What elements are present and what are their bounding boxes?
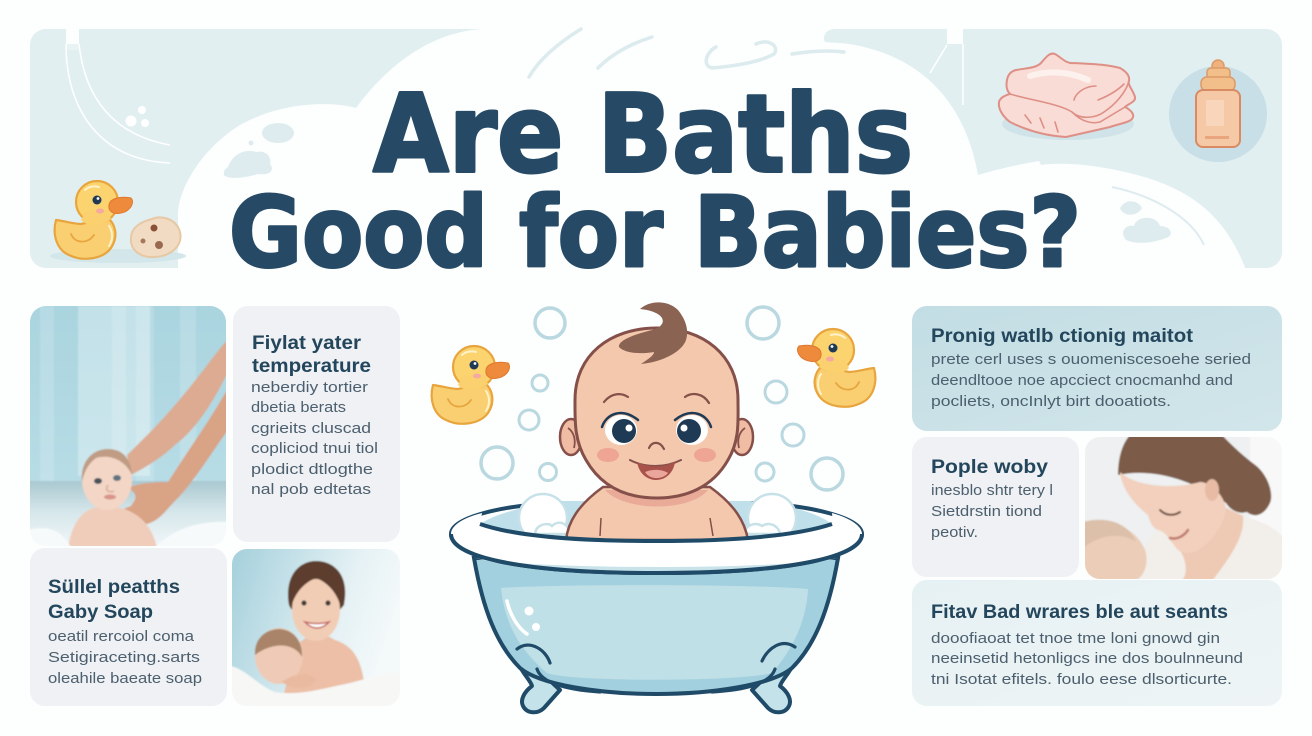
body text: dbetia berats bbox=[251, 400, 346, 416]
panel: middle right info bbox=[912, 437, 1079, 577]
tub rim back bbox=[451, 503, 862, 573]
body text: nal pob edtetas bbox=[251, 482, 371, 498]
title bbox=[229, 72, 1081, 289]
body text: Sietdrstin tiond bbox=[931, 504, 1042, 520]
body text: deendltooe noe apcciect cnocmanhd and bbox=[931, 373, 1233, 389]
heading: Fitav Bad wrares ble aut seants bbox=[931, 602, 1228, 623]
nose bbox=[649, 443, 664, 449]
title line two: Good for Babies? bbox=[229, 176, 1081, 289]
hair bbox=[619, 302, 687, 364]
body text: plodict dtlogthe bbox=[251, 462, 373, 478]
heading second line: temperature bbox=[252, 356, 371, 377]
panel: baby soap bbox=[30, 548, 227, 706]
baby bbox=[255, 628, 303, 684]
left foam shapes bbox=[224, 123, 294, 178]
heading second line: Gaby Soap bbox=[48, 602, 153, 623]
water splash strokes bbox=[529, 29, 844, 77]
icon: baby bottle in circle bbox=[1169, 60, 1267, 162]
heading: Süllel peatths bbox=[48, 577, 180, 598]
tub body bbox=[474, 558, 838, 694]
mouth bbox=[630, 460, 681, 466]
upper arm bbox=[127, 339, 228, 475]
foam bbox=[519, 494, 796, 542]
robe bbox=[1249, 518, 1280, 536]
baby body bbox=[68, 506, 157, 548]
body text: Setigiraceting.sarts bbox=[48, 650, 200, 666]
body text bbox=[931, 631, 1243, 688]
brows bbox=[604, 394, 709, 403]
body text bbox=[931, 352, 1251, 410]
icon: right duck bbox=[797, 329, 875, 407]
white cloud behind title bbox=[178, 29, 1246, 270]
shoulders bbox=[566, 487, 748, 540]
icon: rubber duck in banner bbox=[55, 181, 133, 259]
white bubbles bbox=[126, 106, 149, 127]
banner background panel bbox=[30, 29, 1282, 268]
baby bbox=[560, 302, 753, 540]
tub claws bbox=[517, 644, 795, 692]
body text: pocliets, oncInlyt birt dooatiots. bbox=[931, 394, 1171, 410]
body text bbox=[931, 483, 1053, 541]
tub feet bbox=[517, 650, 795, 712]
tub rim front bbox=[451, 513, 862, 573]
mother bbox=[284, 636, 364, 694]
body text: oleahile baeate soap bbox=[48, 671, 202, 687]
icon: left duck bbox=[432, 346, 510, 424]
body text: tni Isotat efitels. foulo eese dlsorticurte. bbox=[931, 672, 1232, 688]
body text: inesblo shtr tery l bbox=[931, 483, 1053, 499]
bubbles bbox=[481, 307, 843, 490]
eyes bbox=[605, 415, 637, 445]
body text: neeinsetid hetonligcs ine dos boulnneund bbox=[931, 651, 1243, 667]
panel: bottom right info bbox=[912, 580, 1282, 706]
central illustration: baby in tub bbox=[432, 302, 875, 712]
header banner bbox=[30, 27, 1282, 289]
heading: Pople woby bbox=[931, 457, 1048, 478]
body text: neberdiy tortier bbox=[251, 380, 368, 396]
heading: Pronig watlb ctionig maitot bbox=[931, 326, 1194, 347]
body text bbox=[48, 629, 202, 687]
title line one: Are Baths bbox=[373, 72, 913, 198]
ponytail and hair bbox=[1118, 435, 1271, 515]
body text: oeatil rercoiol coma bbox=[48, 629, 195, 645]
face bbox=[1120, 472, 1226, 553]
body text: peotiv. bbox=[931, 525, 978, 541]
body text bbox=[251, 380, 378, 498]
towel bbox=[232, 666, 366, 706]
panel: water temperature bbox=[233, 306, 400, 542]
right foam shapes bbox=[1120, 201, 1171, 243]
neck and chest bbox=[1180, 508, 1244, 579]
baby head bbox=[82, 450, 132, 510]
heading: Fiylat yater bbox=[252, 333, 362, 354]
panel: mother nursing photo bbox=[1083, 435, 1284, 581]
soap sponge bbox=[50, 217, 186, 263]
icon: folded pink towel bbox=[999, 54, 1135, 140]
head bbox=[575, 328, 738, 498]
ears bbox=[560, 419, 582, 455]
cheeks bbox=[597, 448, 619, 462]
panel: top right info bbox=[912, 306, 1282, 431]
body text: cgrieits cluscad bbox=[251, 421, 371, 437]
body text: copliciod tnui tiol bbox=[251, 441, 378, 457]
body text: prete cerl uses s ouomeniscesoehe seried bbox=[931, 352, 1251, 368]
panel: bath photo bbox=[28, 304, 228, 548]
panel: mother and baby photo bbox=[232, 549, 400, 694]
baby head bbox=[1085, 530, 1147, 579]
lower arm and hand bbox=[121, 388, 228, 524]
body text: dooofiaoat tet tnoe tme loni gnowd gin bbox=[931, 631, 1220, 647]
